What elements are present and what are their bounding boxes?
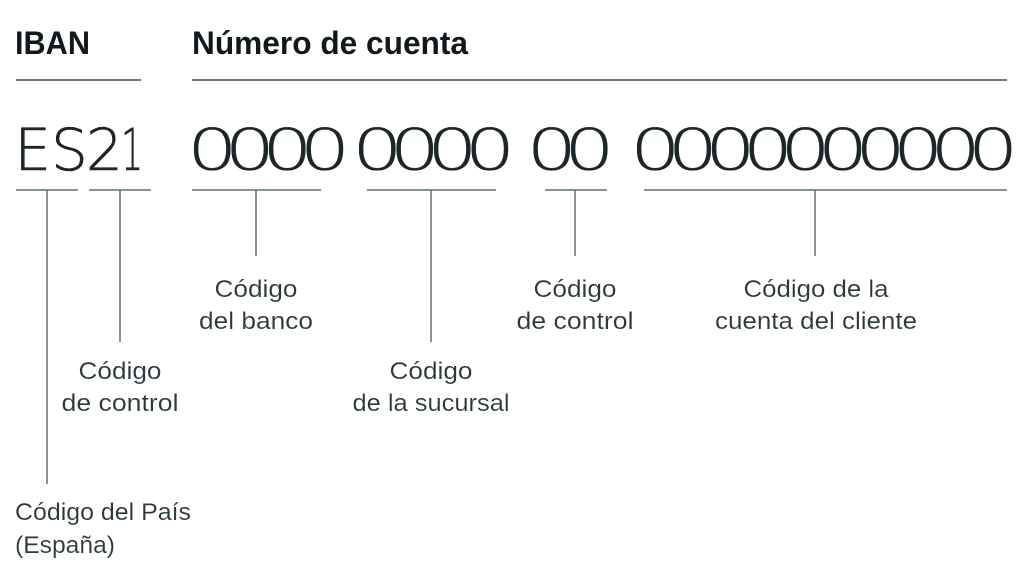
callout: country code: (España) <box>15 532 115 559</box>
callout: client account code: Código de la <box>744 276 889 303</box>
number: ES21 <box>14 116 143 185</box>
heading: Número de cuenta: Número de cuenta <box>192 25 468 61</box>
callout: account control code: Código <box>534 276 616 303</box>
number: ES21: 2 <box>86 116 123 184</box>
heading: IBAN <box>15 25 141 80</box>
number: bank code digits: 0000 <box>187 118 343 183</box>
callout: branch code: de la sucursal <box>352 390 510 417</box>
heading: IBAN: IBAN <box>15 25 90 61</box>
number: control digits: 00 <box>526 118 608 183</box>
callout: bank code <box>192 190 321 335</box>
callout: client account code <box>644 190 1007 335</box>
callout: IBAN control code: Código <box>78 358 162 385</box>
callout: bank code: del banco <box>199 308 313 335</box>
callout: bank code: Código <box>214 276 298 303</box>
callout: client account code: cuenta del cliente <box>715 308 917 335</box>
callout: branch code <box>352 190 510 417</box>
number: ES21: 1 <box>121 118 143 185</box>
callout: country code: Código del País <box>15 499 191 526</box>
callout: branch code: Código <box>390 358 472 385</box>
callout: account control code <box>516 190 634 335</box>
callout: IBAN control code <box>62 190 178 417</box>
number: branch code digits: 0000 <box>352 118 508 183</box>
number: ES21: ES <box>14 116 88 184</box>
callout: IBAN control code: de control <box>62 390 178 417</box>
callout: country code <box>15 190 191 559</box>
callout: account control code: de control <box>516 308 634 335</box>
number: account digits: 0000000000 <box>630 118 1011 183</box>
